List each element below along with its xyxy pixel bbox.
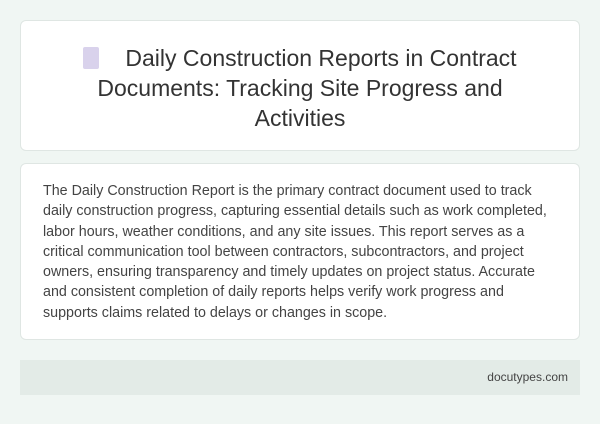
text block — [43, 183, 547, 321]
text block: daily construction progress, capturing essential details such as work completed, — [43, 203, 547, 219]
text block: critical communication tool between contractors, subcontractors, and project — [43, 244, 524, 260]
title: Daily Construction Reports in Contract Documents: Tracking Site Progress and Activities — [97, 45, 517, 131]
footer — [20, 360, 580, 395]
text block: labor hours, weather conditions, and any site issues. This report serves as a — [43, 224, 524, 240]
text block: and consistent completion of daily reports helps verify work progress and — [43, 284, 504, 300]
text block: owners, ensuring transparency and timely updates on project status. Accurate — [43, 264, 535, 280]
footer: docutypes.com — [487, 370, 568, 384]
panel: title card — [20, 20, 580, 151]
text block: The Daily Construction Report is the primary contract document used to track — [43, 183, 532, 199]
text block: supports claims related to delays or changes in scope. — [43, 305, 387, 321]
panel: description — [20, 163, 580, 340]
